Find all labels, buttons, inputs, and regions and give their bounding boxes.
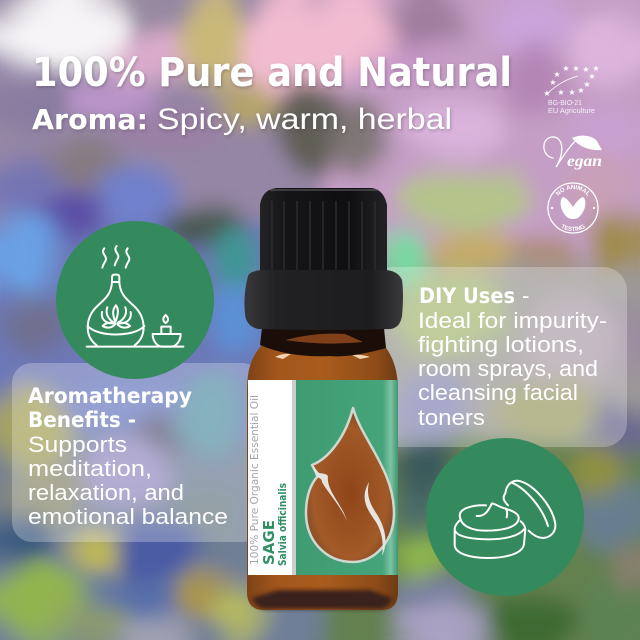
- text block: DIY uses: DIY Uses: [419, 284, 515, 308]
- EU leaf stars: ★: [557, 88, 565, 97]
- EU leaf stars: ★: [543, 89, 551, 98]
- icon: open cream jar: [455, 481, 555, 558]
- text block: aromatherapy benefits: meditation,: [28, 456, 152, 481]
- ring text top: NO ANIMAL: [556, 184, 590, 196]
- subtitle: aroma: [32, 103, 452, 136]
- EU leaf stars: ★: [577, 86, 585, 95]
- text block: aromatherapy benefits: Benefits -: [28, 408, 136, 432]
- text block: aromatherapy benefits: emotional balance: [28, 504, 228, 529]
- vegan feather: [572, 136, 602, 150]
- cap ribs: [272, 201, 375, 270]
- label text: SAGE: SAGE: [260, 520, 278, 565]
- product bottle: [244, 188, 403, 610]
- badge: EU organic: [543, 64, 600, 115]
- EU leaf stars: ★: [592, 64, 600, 73]
- rabbit: [561, 197, 585, 219]
- badge: vegan: [544, 136, 602, 170]
- label: green field: [296, 380, 398, 575]
- text block: aromatherapy benefits: Supports: [28, 432, 127, 457]
- EU leaf stars: ★: [562, 64, 570, 73]
- bottle glass body: [247, 345, 398, 610]
- EU leaf stem: [547, 76, 578, 94]
- text block: aromatherapy benefits: [28, 384, 228, 529]
- icon: aroma diffuser with lotus and candle: [87, 246, 183, 347]
- vegan word: egan: [567, 153, 602, 170]
- EU leaf stars: ★: [582, 65, 590, 74]
- subtitle: aroma: Aroma:: [32, 103, 148, 136]
- EU leaf stars: ★: [549, 78, 557, 87]
- text block: DIY uses: toners: [418, 405, 485, 430]
- EU leaf stars: ★: [572, 64, 580, 73]
- label: strip shadow: [292, 380, 297, 575]
- ring text bottom: TESTING: [562, 224, 585, 231]
- text block: aromatherapy benefits: Aromatherapy: [28, 384, 192, 408]
- text block: DIY uses: -: [522, 283, 529, 308]
- bottle base shadow: [252, 590, 392, 609]
- side dots: [551, 207, 595, 209]
- EU leaf stars: ★: [588, 72, 596, 81]
- label text: Salvia officinalis: Salvia officinalis: [277, 483, 289, 566]
- cap top highlight: [270, 189, 378, 191]
- shoulder highlights: [275, 354, 370, 359]
- panel: aromatherapy benefits backing: [12, 363, 262, 542]
- EU leaf stars: ★: [568, 88, 576, 97]
- text block: DIY uses: room sprays, and: [418, 356, 598, 381]
- badge: no animal testing: [547, 182, 599, 234]
- text block: DIY uses: cleansing facial: [418, 380, 578, 405]
- panel: DIY uses backing: [370, 267, 627, 447]
- label: oil drop: [306, 408, 394, 562]
- green circle: cream jar: [426, 438, 584, 596]
- EU leaf stars: [543, 64, 600, 98]
- text block: DIY uses: fighting lotions,: [418, 332, 584, 357]
- subtitle: aroma: Spicy, warm, herbal: [157, 103, 452, 136]
- label: white strip: [248, 380, 292, 575]
- label text: product line: 100% Pure Organic Essential Oil: [248, 395, 261, 565]
- neck highlight: [285, 334, 363, 344]
- EU agriculture: EU Agriculture: [548, 106, 595, 115]
- dark neck: [260, 328, 386, 356]
- EU leaf stars: ★: [553, 70, 561, 79]
- EU leaf stars: ★: [583, 80, 591, 89]
- outer ring: [548, 183, 598, 233]
- text block: DIY uses: Ideal for impurity-: [418, 308, 607, 333]
- title: 100% Pure and Natural: [32, 50, 512, 96]
- text block: DIY uses: [418, 283, 607, 430]
- EU code: BG-BIO-21: [548, 98, 582, 107]
- vegan swirl V: [544, 137, 577, 167]
- cap collar: [244, 270, 403, 330]
- text block: aromatherapy benefits: relaxation, and: [28, 480, 184, 505]
- green circle: diffuser: [56, 221, 214, 379]
- cap ribbed section: [260, 188, 387, 272]
